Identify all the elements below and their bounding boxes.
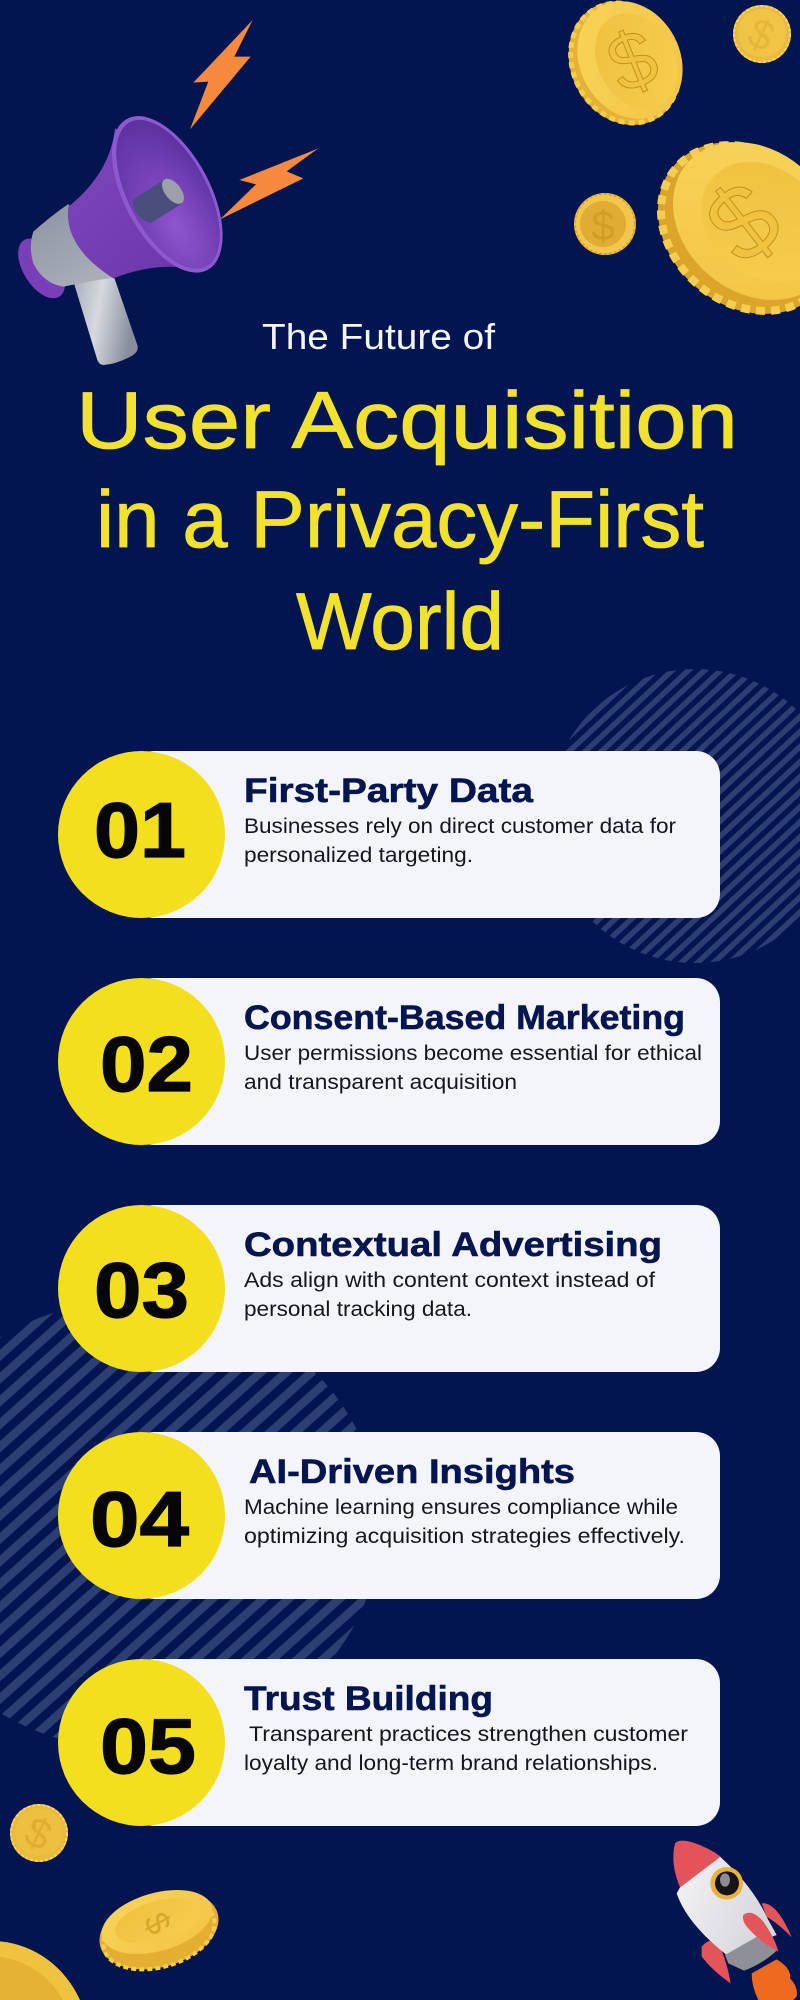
card 03 body: Ads align with content context instead of xyxy=(244,1268,655,1292)
icon: lightning bolt right xyxy=(220,148,318,219)
coin: large right: $ xyxy=(685,159,800,286)
title line 3: World xyxy=(296,577,504,667)
coin: bottom left corner xyxy=(0,1941,80,2000)
rocket window frame xyxy=(710,1867,743,1900)
coin: top centre xyxy=(547,0,703,145)
number 05: 05 xyxy=(100,1702,196,1790)
card 01 body xyxy=(244,814,676,867)
megaphone back rim xyxy=(8,230,75,306)
megaphone collar xyxy=(31,204,115,287)
coin: middle small: $ xyxy=(591,202,615,249)
card 02 body xyxy=(244,1041,702,1094)
rocket nose xyxy=(673,1841,721,1887)
card 02 heading: Consent-Based Marketing xyxy=(244,999,685,1037)
number 01: 01 xyxy=(94,786,186,874)
card 04 body xyxy=(244,1495,685,1548)
coin: top centre: $ xyxy=(595,11,670,110)
number badge 01 xyxy=(58,751,225,918)
card 01 heading: First-Party Data xyxy=(244,772,534,810)
card 03 heading: Contextual Advertising xyxy=(244,1226,662,1264)
megaphone driver cap xyxy=(158,175,188,208)
icon: rocket xyxy=(673,1841,797,2000)
card 01 body: personalized targeting. xyxy=(244,843,473,867)
number badge 05 xyxy=(58,1659,225,1826)
megaphone bell rim xyxy=(89,99,246,290)
number 02: 02 xyxy=(100,1020,193,1108)
rocket centre fin xyxy=(743,1913,778,1952)
coin: top right small: $ xyxy=(741,8,782,61)
panel: card 04 AI-Driven Insights xyxy=(58,1432,720,1599)
card 03 body: personal tracking data. xyxy=(244,1297,472,1321)
rocket white body xyxy=(677,1857,777,1955)
title xyxy=(76,376,738,667)
heading: intro line: The Future of xyxy=(262,316,496,357)
card 02 body: and transparent acquisition xyxy=(244,1070,517,1094)
card 05 body xyxy=(244,1722,688,1775)
title line 2: in a Privacy-First xyxy=(96,475,704,565)
number 04: 04 xyxy=(90,1475,189,1563)
decorative stripes: top right blob xyxy=(548,669,800,963)
coin: top right small xyxy=(733,5,791,63)
coin: middle small xyxy=(574,193,636,255)
icon: lightning bolt top xyxy=(190,20,253,129)
card 02 body: User permissions become essential for ethical xyxy=(244,1041,702,1065)
megaphone horn body xyxy=(68,128,220,278)
decorative stripes: lower left blob xyxy=(0,1300,380,1750)
card background xyxy=(130,1205,720,1372)
panel: card 01 First-Party Data xyxy=(58,751,720,918)
card background xyxy=(130,978,720,1145)
card 04 body: Machine learning ensures compliance while xyxy=(244,1495,678,1519)
card 05 heading: Trust Building xyxy=(244,1680,493,1718)
icon: megaphone with lightning bolts xyxy=(8,20,318,365)
coin: bottom centre xyxy=(90,1878,228,1982)
rocket engine band xyxy=(725,1935,777,1971)
card background xyxy=(130,751,720,918)
rocket window xyxy=(715,1871,739,1895)
card background xyxy=(130,1432,720,1599)
number badge 02 xyxy=(58,978,225,1145)
card 04 heading: AI-Driven Insights xyxy=(249,1453,575,1491)
number badge 03 xyxy=(58,1205,225,1372)
card 05 body: loyalty and long-term brand relationships. xyxy=(244,1751,658,1775)
number badge 04 xyxy=(58,1432,225,1599)
card background xyxy=(130,1659,720,1826)
card 05 body: Transparent practices strengthen customer xyxy=(249,1722,688,1746)
panel: card 03 Contextual Advertising xyxy=(58,1205,720,1372)
coin: bottom left small xyxy=(10,1804,68,1862)
card 03 body xyxy=(244,1268,655,1321)
coin: bottom centre: $ xyxy=(136,1906,178,1941)
megaphone driver xyxy=(133,180,183,223)
panel: card 05 Trust Building xyxy=(58,1659,720,1826)
megaphone handle xyxy=(74,275,138,365)
rocket left fin xyxy=(702,1941,731,1983)
card 04 body: optimizing acquisition strategies effectively. xyxy=(244,1524,685,1548)
rocket window glint xyxy=(720,1873,730,1887)
rocket right fin xyxy=(762,1903,792,1937)
coin: large right xyxy=(623,107,800,349)
panel: card 02 Consent-Based Marketing xyxy=(58,978,720,1145)
card 01 body: Businesses rely on direct customer data for xyxy=(244,814,676,838)
number 03: 03 xyxy=(94,1246,189,1334)
coin: bottom left small: $ xyxy=(18,1807,59,1860)
title line 1: User Acquisition xyxy=(76,376,738,466)
megaphone bell interior xyxy=(95,104,241,285)
rocket flame xyxy=(752,1959,797,2000)
